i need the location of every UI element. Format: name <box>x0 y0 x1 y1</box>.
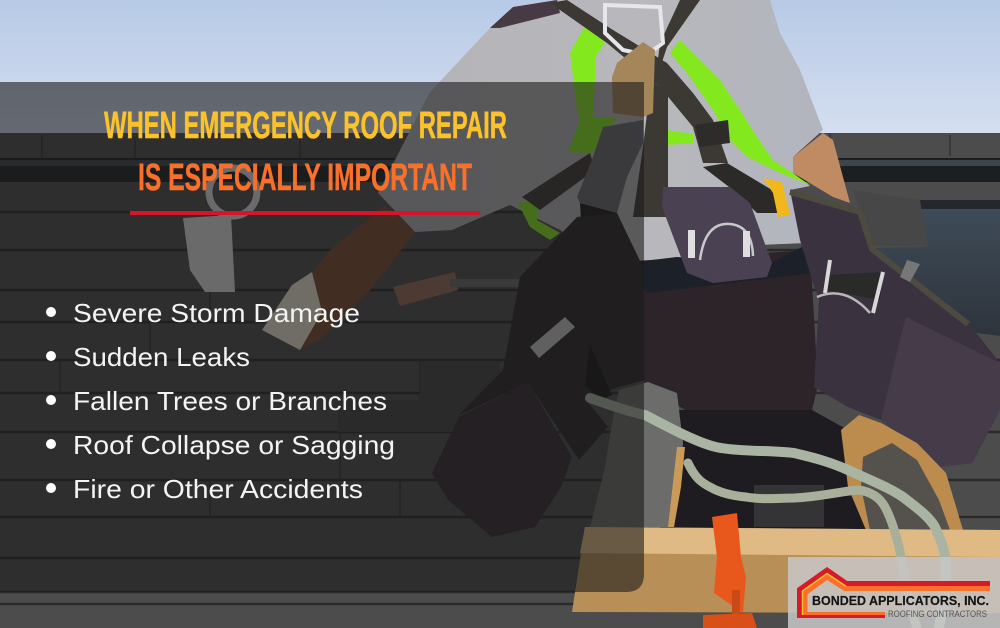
safety rope <box>590 398 946 628</box>
right tool belt and pouches <box>790 190 1000 467</box>
arm: right <box>793 133 850 203</box>
dark text panel overlay <box>0 82 644 592</box>
background: sky <box>0 0 1000 140</box>
logo: house roofline mark <box>797 570 990 618</box>
item: fallen trees or branches: Fallen Trees or Branches <box>73 386 387 416</box>
orange roof jack <box>703 513 757 628</box>
background: flashing panel at right <box>853 190 1000 336</box>
background: shingled roof <box>0 133 1000 628</box>
item: fire or other accidents: Fire or Other Accidents <box>73 474 363 504</box>
boots <box>590 382 963 530</box>
title line 1: WHEN EMERGENCY ROOF REPAIR <box>104 105 507 147</box>
company logo panel <box>788 557 1000 628</box>
belt <box>627 243 813 293</box>
safety d-ring <box>605 5 663 55</box>
worker <box>262 0 1000 537</box>
hammer <box>393 272 525 306</box>
wooden plank <box>572 527 1000 613</box>
arm: left with glove <box>262 205 415 350</box>
title <box>104 105 507 199</box>
title line 2: IS ESPECIALLY IMPORTANT <box>138 157 472 199</box>
yellow belt tag <box>763 178 790 217</box>
pants <box>620 250 818 410</box>
bullet list <box>46 298 395 504</box>
left tool belt and pouches <box>432 213 645 537</box>
item: roof collapse or sagging: Roof Collapse or Sagging <box>73 430 395 460</box>
shirt <box>378 0 823 262</box>
shock absorber pack <box>577 120 643 320</box>
item: severe storm damage: Severe Storm Damage <box>73 298 360 328</box>
center tool pouch <box>662 187 772 283</box>
item: sudden leaks: Sudden Leaks <box>73 342 250 372</box>
logo: tagline: ROOFING CONTRACTORS <box>888 609 987 619</box>
dark leg gap <box>660 410 866 530</box>
logo: company name: BONDED APPLICATORS, INC. <box>812 594 989 608</box>
roof bracket <box>183 168 257 292</box>
title underline <box>130 211 480 215</box>
snap hook <box>612 42 655 117</box>
harness: green webbing <box>518 22 810 240</box>
harness: dark straps <box>490 0 780 217</box>
